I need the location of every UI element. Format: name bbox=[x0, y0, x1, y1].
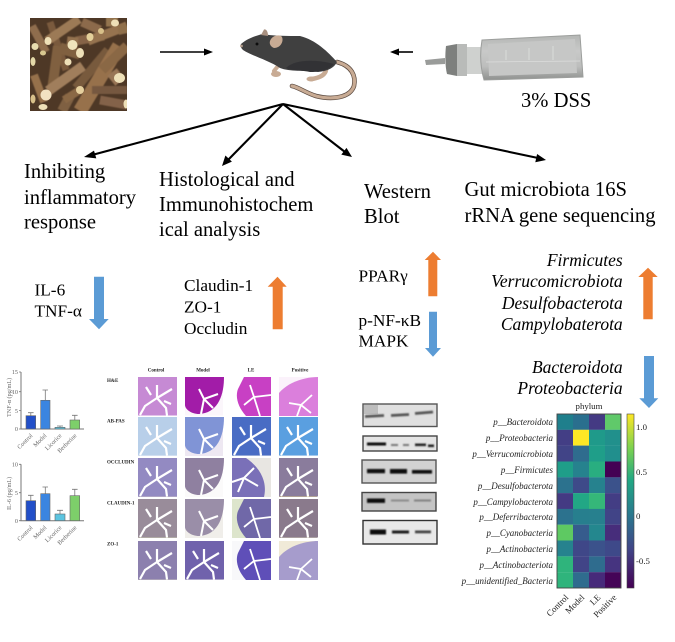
heatmap row labels: p__Actinobacteria bbox=[485, 544, 554, 554]
heatmap title: phylum bbox=[576, 401, 603, 411]
column headings: LE bbox=[248, 368, 255, 374]
text: PPAR gamma: PPARγ bbox=[358, 267, 408, 286]
heading: western blot: Blot bbox=[364, 206, 400, 228]
heading: inhibiting inflammatory response: inflammatory bbox=[24, 187, 137, 209]
bar chart: IL-6: 5 bbox=[15, 490, 18, 497]
arrows: branching from the mouse bbox=[84, 104, 546, 166]
row: CLAUDIN-1: CLAUDIN-1 bbox=[107, 502, 135, 506]
heatmap row labels: p__Desulfobacterota bbox=[477, 481, 554, 491]
arrow: PPAR gamma up bbox=[425, 252, 441, 296]
bar chart: TNF-alpha: 5 bbox=[15, 408, 18, 415]
photo: licorice root pile bbox=[30, 18, 128, 111]
bar chart: TNF-alpha: TNF-α (pg/mL) bbox=[6, 378, 13, 417]
arrow: licorice to mouse bbox=[160, 48, 213, 56]
blot 5 bbox=[363, 520, 437, 544]
icon: mouse bbox=[240, 29, 354, 98]
text: cytokine markers: TNF-α bbox=[34, 302, 82, 321]
bar chart: TNF-alpha: 10 bbox=[12, 389, 18, 396]
row: ZO-1: ZO-1 bbox=[107, 542, 119, 548]
heatmap row labels: p__unidentified_Bacteria bbox=[461, 576, 554, 586]
text: tight junction markers: Claudin-1 bbox=[184, 276, 253, 295]
bar chart: TNF-alpha: Control bbox=[16, 432, 35, 451]
heatmap row labels: p__Campylobacterota bbox=[472, 497, 554, 507]
arrow: NF-kB down bbox=[425, 312, 441, 357]
bar chart: IL-6: Berberine bbox=[56, 524, 79, 547]
heatmap cells bbox=[557, 414, 621, 588]
row: ZO-1 bbox=[107, 541, 318, 580]
text: increased phyla: Desulfobacterota bbox=[501, 293, 623, 313]
row: AB-PAS bbox=[107, 417, 318, 456]
text: increased phyla: Firmicutes bbox=[546, 250, 623, 270]
bar chart: IL-6: Licorice bbox=[44, 524, 64, 544]
bar chart: IL-6 bbox=[6, 462, 84, 547]
heading: gut microbiota sequencing: Gut microbiota 16S bbox=[464, 179, 627, 201]
bar chart: IL-6: Model bbox=[32, 524, 49, 541]
bar chart: IL-6: Control bbox=[16, 524, 35, 543]
bar chart: TNF-alpha bbox=[6, 369, 84, 455]
panel: histology micrographs bbox=[107, 368, 318, 580]
row: H&E bbox=[107, 377, 318, 416]
bar chart: TNF-alpha: Model bbox=[32, 432, 49, 449]
column headings: Control bbox=[148, 368, 165, 374]
column headings: Model bbox=[196, 368, 210, 374]
text: decreased phyla: Proteobacteria bbox=[516, 378, 623, 398]
arrow: phyla up bbox=[638, 268, 658, 319]
heatmap column labels: Control bbox=[544, 592, 571, 618]
heatmap column labels: LE bbox=[588, 592, 602, 607]
heatmap colour bar bbox=[627, 414, 651, 588]
blot 3 bbox=[362, 460, 436, 483]
heatmap colour bar: 0 bbox=[636, 511, 641, 521]
column headings: Positive bbox=[292, 368, 309, 374]
bar chart: TNF-alpha: 0 bbox=[15, 426, 18, 433]
heatmap row labels: p__Deferribacterota bbox=[478, 512, 554, 522]
heading: histological analysis: Immunohistochem bbox=[159, 194, 313, 216]
text: p-NF-kB and MAPK: p-NF-κB bbox=[358, 311, 421, 330]
arrow: cytokines down bbox=[89, 277, 109, 329]
panel: western blots bbox=[362, 404, 437, 544]
heatmap row labels bbox=[461, 417, 554, 586]
label: 3% DSS: 3% DSS bbox=[521, 90, 591, 112]
heatmap row labels: p__Bacteroidota bbox=[492, 417, 554, 427]
heatmap column labels: Positive bbox=[591, 592, 618, 619]
bar chart: IL-6: 0 bbox=[15, 518, 18, 525]
heading: histological analysis: ical analysis bbox=[159, 219, 260, 241]
heatmap column labels: Model bbox=[563, 592, 587, 616]
blot 1 bbox=[363, 404, 437, 426]
row: OCCLUDIN bbox=[107, 458, 318, 497]
heatmap row labels: p__Actinobacteriota bbox=[479, 560, 554, 570]
row: H&E: H&E bbox=[107, 379, 119, 384]
heatmap colour bar: 0.5 bbox=[636, 467, 648, 477]
bar chart: TNF-alpha: Licorice bbox=[44, 432, 64, 452]
heatmap colour bar: 1.0 bbox=[636, 422, 648, 432]
text: p-NF-kB and MAPK: MAPK bbox=[358, 332, 409, 351]
arrow: DSS to mouse bbox=[390, 48, 413, 56]
heading: inhibiting inflammatory response: response bbox=[24, 212, 96, 234]
row: OCCLUDIN: OCCLUDIN bbox=[107, 460, 135, 466]
heading: western blot: Western bbox=[364, 181, 431, 203]
heatmap column labels bbox=[544, 592, 618, 619]
text: tight junction markers: ZO-1 bbox=[184, 298, 221, 317]
arrow: phyla down bbox=[639, 356, 658, 408]
text: cytokine markers: IL-6 bbox=[34, 281, 66, 300]
text: increased phyla: Verrucomicrobiota bbox=[491, 271, 623, 291]
text: increased phyla: Campylobaterota bbox=[501, 314, 623, 334]
heatmap row labels: p__Cyanobacteria bbox=[485, 528, 554, 538]
arrow: tight junctions up bbox=[268, 277, 287, 329]
heading: gut microbiota sequencing: rRNA gene sequencing bbox=[464, 205, 656, 227]
bar chart: IL-6: 10 bbox=[12, 462, 18, 468]
heatmap row labels: p__Verrucomicrobiota bbox=[471, 449, 554, 459]
bar chart: TNF-alpha: 15 bbox=[12, 369, 18, 376]
heatmap row labels: p__Firmicutes bbox=[500, 465, 554, 475]
heatmap row labels: p__Proteobacteria bbox=[485, 433, 554, 443]
bar chart: IL-6: IL-6 (pg/mL) bbox=[6, 477, 13, 510]
bar chart: TNF-alpha: Berberine bbox=[56, 432, 79, 455]
row: AB-PAS: AB-PAS bbox=[107, 420, 125, 424]
heading: inhibiting inflammatory response: Inhibiting bbox=[24, 161, 105, 183]
blot 2 bbox=[363, 436, 437, 451]
heatmap: phylum abundance bbox=[461, 401, 651, 619]
blot 4 bbox=[362, 492, 436, 511]
text: decreased phyla: Bacteroidota bbox=[532, 357, 623, 377]
heatmap colour bar: -0.5 bbox=[636, 556, 651, 566]
column headings bbox=[148, 368, 309, 374]
heading: histological analysis: Histological and bbox=[159, 169, 295, 191]
row: CLAUDIN-1 bbox=[107, 499, 318, 538]
text: tight junction markers: Occludin bbox=[184, 319, 248, 338]
icon: DSS water bottle bbox=[425, 35, 583, 80]
